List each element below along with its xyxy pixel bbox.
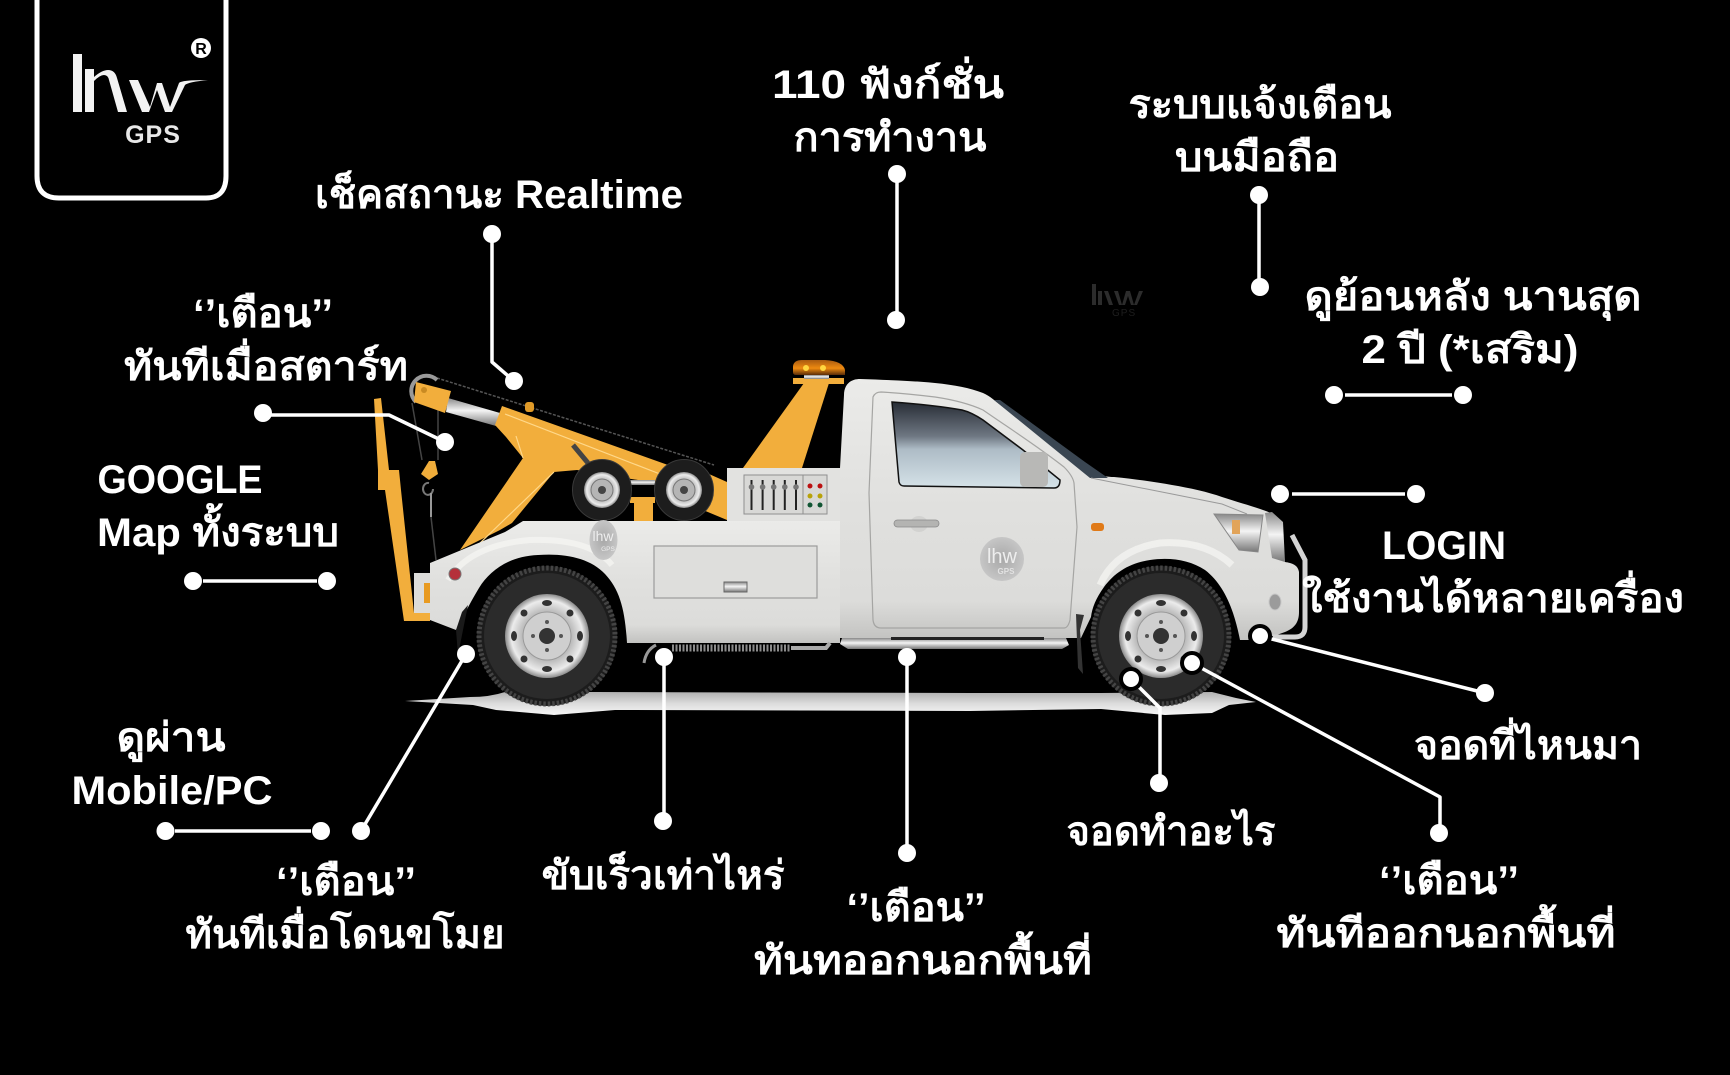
callout: mobile or pc	[72, 716, 330, 840]
tow truck	[374, 360, 1305, 706]
callout: where parked	[1250, 626, 1642, 768]
bull bar	[1273, 535, 1305, 637]
spare wheel left	[572, 460, 632, 520]
sliders	[749, 480, 799, 510]
exhaust	[644, 643, 830, 663]
callout: mobile notifications	[1128, 83, 1392, 296]
door logo badge: GPS	[998, 567, 1015, 576]
logo GPS text: GPS	[125, 121, 181, 149]
wing mirror	[1020, 452, 1048, 487]
callout: history	[1304, 275, 1642, 404]
boom piston	[573, 445, 588, 463]
front mud flap	[1076, 614, 1084, 674]
registered mark: R	[195, 41, 207, 58]
fog lamp	[1269, 594, 1281, 610]
callout: login: LOGIN	[1382, 524, 1506, 568]
callout: geofence alert right: ทันทีออกนอกพื้นที่	[1276, 904, 1616, 956]
door logo badge: lhw	[987, 546, 1018, 568]
callout: mobile notifications: บนมือถือ	[1175, 136, 1339, 180]
tool box	[654, 546, 817, 598]
callout: theft alert	[186, 645, 504, 957]
callout: geofence alert center	[754, 648, 1092, 983]
callout: start alert: ‘’เตือน’’	[193, 292, 333, 336]
front fender highlight	[1100, 543, 1232, 585]
callout: 110 functions	[772, 56, 1004, 329]
tail light	[449, 568, 461, 580]
spare wheel right	[654, 460, 714, 520]
callout: theft alert: ทันทีเมื่อโดนขโมย	[186, 906, 504, 957]
callout: realtime status	[315, 169, 683, 390]
callout: 110 functions: 110 ฟังก์ชั่น	[772, 56, 1004, 107]
rear wheel	[477, 566, 617, 706]
callout: google map: GOOGLE	[98, 458, 262, 502]
registered mark	[191, 38, 211, 58]
callout: login: ใช้งานได้หลายเครื่อง	[1302, 570, 1684, 621]
beacon light	[793, 360, 845, 384]
callout: mobile or pc: ดูผ่าน	[116, 716, 226, 762]
bed logo badge: GPS	[601, 546, 616, 553]
windshield	[994, 400, 1108, 478]
callout: history: ดูย้อนหลัง นานสุด	[1304, 275, 1642, 322]
grille	[1265, 512, 1285, 562]
truck bed body	[430, 521, 840, 643]
callout: geofence alert right	[1182, 653, 1616, 956]
ground reflection	[405, 692, 1256, 715]
control panel box	[727, 468, 840, 522]
boom knob	[525, 402, 534, 412]
callout: mobile notifications: ระบบแจ้งเตือน	[1128, 83, 1392, 127]
callout: theft alert: ‘’เตือน’’	[276, 860, 416, 904]
door handle	[894, 516, 939, 532]
faint watermark logo	[1092, 284, 1143, 319]
rear stabilizer leg	[374, 398, 430, 621]
callout: realtime status: เช็คสถานะ Realtime	[315, 169, 683, 217]
winch lines and hook	[412, 403, 438, 560]
boom highlights	[478, 414, 660, 545]
callout: parked doing what	[1066, 669, 1276, 854]
callout: mobile or pc: Mobile/PC	[72, 769, 272, 813]
headlight	[1214, 514, 1263, 552]
logo mark	[73, 54, 208, 112]
callout: google map: Map ทั้งระบบ	[97, 503, 339, 555]
callout: geofence alert center: ‘’เตือน’’	[846, 886, 986, 930]
hood line	[1091, 478, 1247, 514]
headlight amber	[1232, 520, 1240, 534]
faint watermark logo: GPS	[1112, 308, 1136, 319]
wheel lift stand	[630, 480, 655, 521]
sill shadow	[891, 637, 1044, 640]
bed logo badge: lhw	[592, 528, 614, 544]
door logo badge	[980, 537, 1024, 581]
pulley	[411, 376, 451, 413]
callout: start alert: ทันทีเมื่อสตาร์ท	[124, 338, 408, 389]
callout: speed	[542, 648, 785, 898]
bed logo badge	[590, 520, 618, 560]
main boom	[460, 406, 727, 550]
side window	[892, 402, 1060, 488]
turn signal	[1091, 523, 1104, 531]
door outline	[869, 392, 1077, 628]
rear mud flap	[456, 605, 468, 655]
callout: google map	[97, 458, 339, 590]
side sill	[840, 638, 1069, 649]
callout: geofence alert right: ‘’เตือน’’	[1379, 859, 1519, 903]
callout: start alert	[124, 292, 454, 451]
rear fender highlight	[448, 540, 612, 580]
logo frame	[37, 0, 226, 198]
callout: geofence alert center: ทันทออกนอกพื้นที่	[754, 931, 1092, 983]
rear bracket	[414, 573, 431, 613]
crane mast	[743, 383, 829, 468]
indicator lights	[808, 484, 822, 508]
front wheel	[1091, 566, 1231, 706]
callout: speed: ขับเร็วเท่าไหร่	[542, 850, 785, 898]
crane cable	[437, 378, 714, 465]
callout: login	[1271, 485, 1684, 621]
callout: 110 functions: การทำงาน	[794, 116, 986, 160]
callout: parked doing what: จอดทำอะไร	[1066, 808, 1276, 854]
callout: history: 2 ปี (*เสริม)	[1362, 328, 1578, 372]
callout: where parked: จอดที่ไหนมา	[1414, 717, 1642, 768]
cab body	[840, 379, 1299, 640]
boom cylinder	[446, 398, 500, 426]
